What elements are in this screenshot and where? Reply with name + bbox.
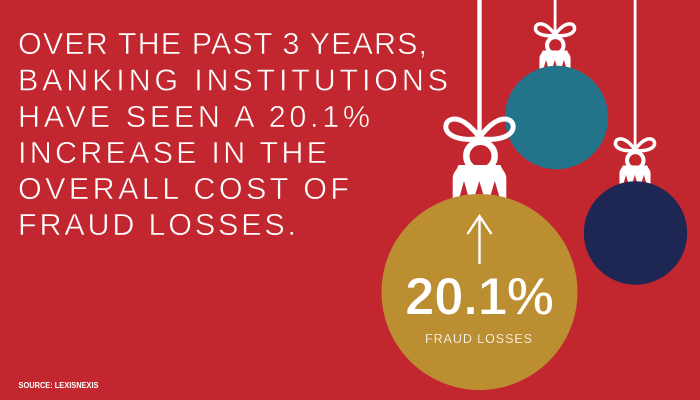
- heading text: FRAUD LOSSES.: [18, 208, 296, 242]
- heading text: [18, 27, 448, 242]
- heading text: OVER THE PAST 3 YEARS,: [18, 27, 427, 61]
- source note: SOURCE: LEXISNEXIS: [18, 381, 99, 390]
- big percentage: 20.1%: [405, 268, 554, 326]
- fraud losses label: FRAUD LOSSES: [425, 332, 532, 346]
- heading text: OVERALL COST OF: [18, 172, 349, 206]
- heading text: HAVE SEEN A 20.1%: [18, 100, 370, 134]
- navy ornament: [584, 0, 687, 285]
- heading text: BANKING INSTITUTIONS: [18, 64, 448, 98]
- heading text: INCREASE IN THE: [18, 136, 327, 170]
- teal ornament: [505, 0, 608, 169]
- gold ornament: [382, 0, 578, 390]
- up arrow icon: [468, 216, 492, 264]
